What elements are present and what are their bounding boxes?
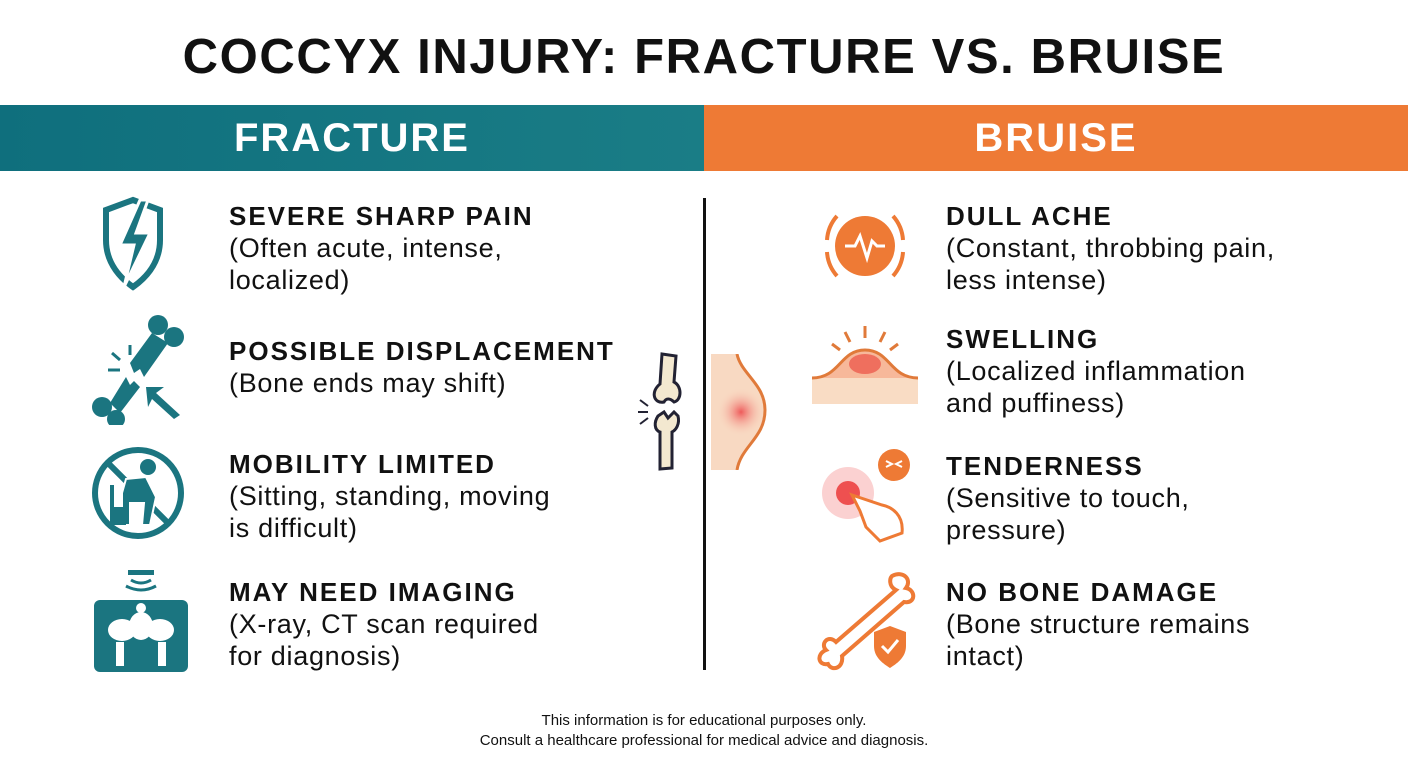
- icon: broken bone: [92, 315, 184, 425]
- item: possible displacement: [229, 336, 615, 398]
- icon: intact bone: [817, 572, 916, 670]
- icon: shield lightning: [103, 196, 163, 291]
- item: swelling: (Localized inflammation: [946, 356, 1246, 386]
- divider line: [703, 198, 706, 670]
- title: COCCYX INJURY: FRACTURE VS. BRUISE: [183, 30, 1225, 84]
- center icon: bone joint: [638, 352, 682, 471]
- header: bruise: BRUISE: [974, 116, 1138, 160]
- item: no bone damage: (Bone structure remains: [946, 609, 1250, 639]
- item: no bone damage: [946, 577, 1250, 671]
- item: dull ache: DULL ACHE: [946, 201, 1113, 231]
- item: dull ache: [946, 201, 1275, 295]
- item: severe sharp pain: [229, 201, 534, 295]
- item: possible displacement: POSSIBLE DISPLACEMENT: [229, 336, 615, 366]
- item: tenderness: pressure): [946, 515, 1066, 545]
- item: swelling: SWELLING: [946, 324, 1099, 354]
- item: mobility limited: [229, 449, 550, 543]
- item: tenderness: TENDERNESS: [946, 451, 1144, 481]
- item: imaging: [229, 577, 539, 671]
- icon: dull ache: [825, 214, 905, 278]
- icon: swelling: [812, 326, 918, 404]
- item: possible displacement: (Bone ends may shift): [229, 368, 506, 398]
- item: mobility limited: MOBILITY LIMITED: [229, 449, 496, 479]
- item: severe sharp pain: localized): [229, 265, 350, 295]
- item: no bone damage: intact): [946, 641, 1024, 671]
- header: bruise: [704, 105, 1408, 171]
- footer disclaimer: [480, 712, 928, 749]
- item: dull ache: less intense): [946, 265, 1107, 295]
- item: mobility limited: (Sitting, standing, moving: [229, 481, 550, 511]
- item: imaging: for diagnosis): [229, 641, 401, 671]
- header: fracture: FRACTURE: [234, 116, 470, 160]
- item: tenderness: [946, 451, 1190, 545]
- footer disclaimer: This information is for educational purposes only.: [542, 712, 866, 729]
- footer disclaimer: Consult a healthcare professional for medical advice and diagnosis.: [480, 732, 928, 749]
- icon: tenderness: [822, 449, 910, 543]
- item: swelling: [946, 324, 1246, 418]
- item: severe sharp pain: (Often acute, intense,: [229, 233, 503, 263]
- item: severe sharp pain: SEVERE SHARP PAIN: [229, 201, 534, 231]
- icon: imaging: [94, 570, 188, 672]
- item: dull ache: (Constant, throbbing pain,: [946, 233, 1275, 263]
- item: imaging: MAY NEED IMAGING: [229, 577, 517, 607]
- center icon: bruise bump: [711, 354, 766, 470]
- item: mobility limited: is difficult): [229, 513, 358, 543]
- item: tenderness: (Sensitive to touch,: [946, 483, 1190, 513]
- item: no bone damage: NO BONE DAMAGE: [946, 577, 1218, 607]
- icon: mobility limited: [92, 447, 184, 539]
- item: imaging: (X-ray, CT scan required: [229, 609, 539, 639]
- header: fracture: [0, 105, 704, 171]
- item: swelling: and puffiness): [946, 388, 1125, 418]
